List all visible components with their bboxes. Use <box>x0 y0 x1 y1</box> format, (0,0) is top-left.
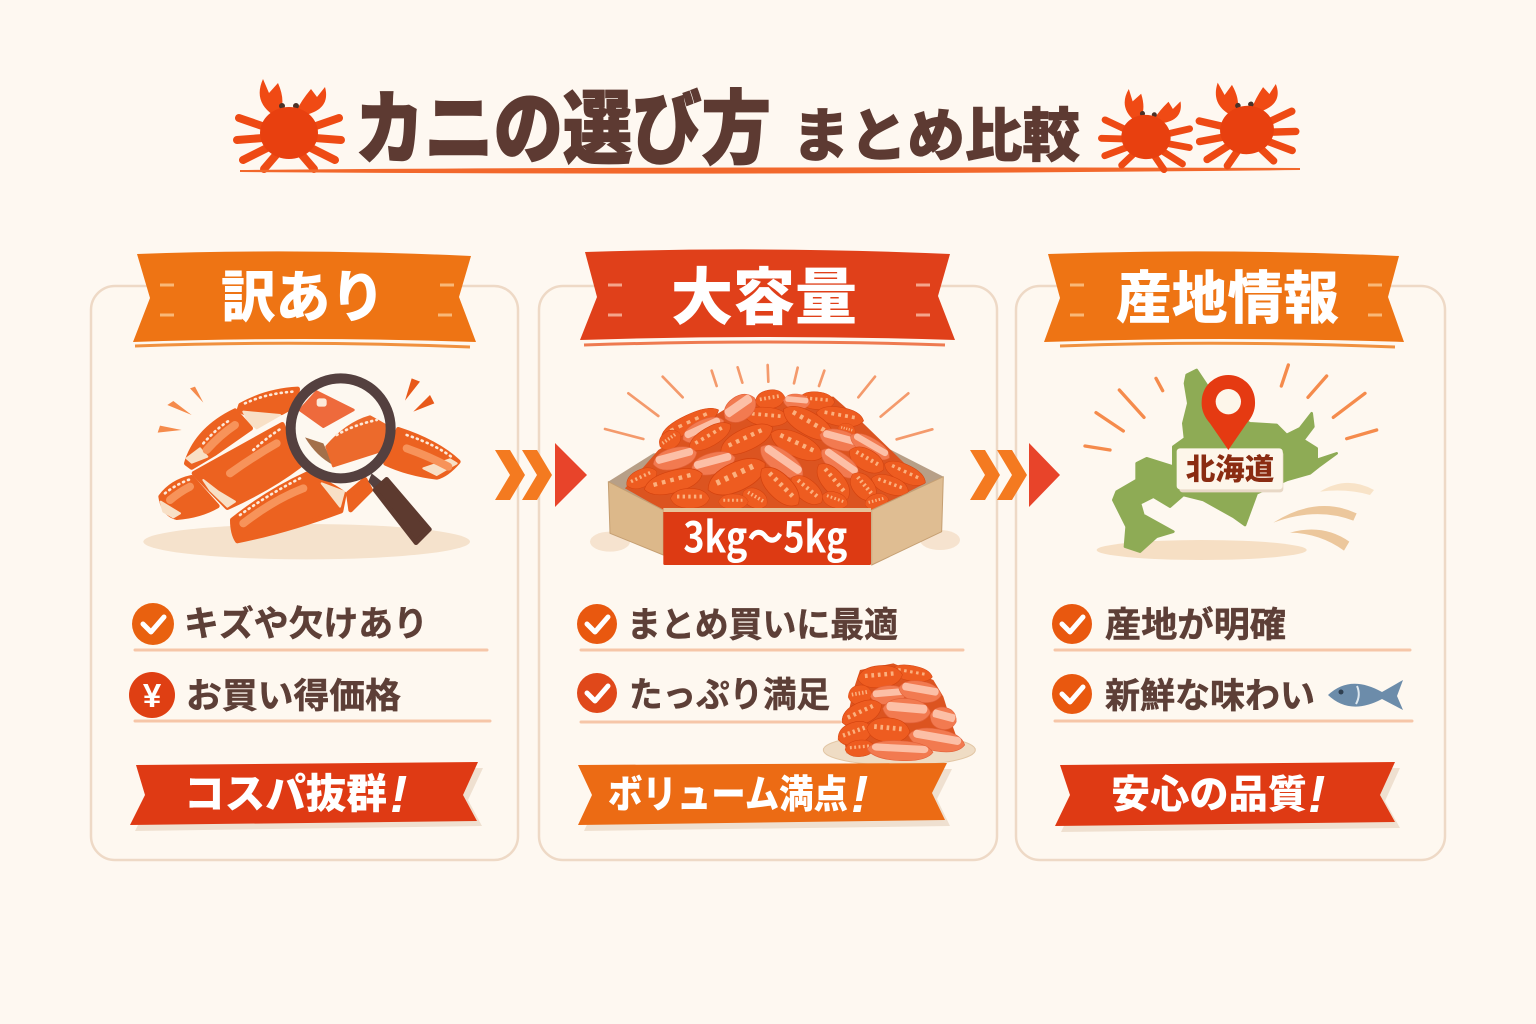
banner: 訳あり: 訳あり <box>221 266 385 329</box>
banner: 訳あり <box>133 251 476 347</box>
ribbon: ボリューム満点！ <box>578 763 952 831</box>
ribbon: ボリューム満点！: ! <box>851 766 868 824</box>
icon: fish <box>1328 680 1403 710</box>
ribbon: コスパ抜群！: ! <box>390 766 407 824</box>
ribbon: コスパ抜群！: コスパ抜群 <box>184 771 387 817</box>
arrow 1 <box>495 443 587 507</box>
list item: お買い得価格: お買い得価格 <box>186 677 401 716</box>
title sub text: まとめ比較 <box>792 104 1080 169</box>
ribbon: 安心の品質！ <box>1055 762 1400 832</box>
illustration: Hokkaido map with pin <box>1085 365 1377 560</box>
illustration: box of crab legs: 3kg～5kg <box>683 505 847 566</box>
list item: お買い得価格 <box>129 672 401 718</box>
ribbon: コスパ抜群！ <box>130 762 483 831</box>
illustration: plate of crab legs <box>823 662 975 765</box>
icon: crab right 1 <box>1099 87 1195 172</box>
panel: 大容量 <box>539 249 997 860</box>
title main text: カニの選び方 <box>355 85 771 174</box>
banner: 大容量: 大容量 <box>671 264 857 333</box>
card background <box>539 286 997 860</box>
arrow 2 <box>970 443 1060 507</box>
icon: crab left <box>237 79 341 169</box>
panel: 産地情報 <box>1016 251 1445 860</box>
list item: キズや欠けあり: キズや欠けあり <box>184 604 428 644</box>
ribbon: 安心の品質！: ! <box>1308 766 1325 824</box>
banner: 産地情報: 産地情報 <box>1116 267 1339 331</box>
card background <box>91 286 518 860</box>
ribbon: 安心の品質！: 安心の品質 <box>1111 774 1307 817</box>
illustration: box of crab legs <box>590 365 960 566</box>
list item: まとめ買いに最適: まとめ買いに最適 <box>627 606 898 645</box>
title block <box>237 75 1300 174</box>
title underline <box>240 167 1300 174</box>
list item: 産地が明確: 産地が明確 <box>1105 606 1286 645</box>
banner: 産地情報 <box>1044 251 1404 347</box>
list item: お買い得価格: ¥ <box>143 677 162 714</box>
card background <box>1016 286 1445 860</box>
ribbon: ボリューム満点！: ボリューム満点 <box>608 774 848 817</box>
list item: 新鮮な味わい: 新鮮な味わい <box>1105 677 1315 716</box>
panel: 訳あり <box>91 251 518 860</box>
list item: たっぷり満足: たっぷり満足 <box>629 676 830 715</box>
icon: crab right 2 <box>1194 75 1299 168</box>
illustration: crab legs with magnifier <box>143 378 470 559</box>
illustration: Hokkaido map with pin: 北海道 <box>1186 453 1274 486</box>
banner: 大容量 <box>580 249 955 345</box>
